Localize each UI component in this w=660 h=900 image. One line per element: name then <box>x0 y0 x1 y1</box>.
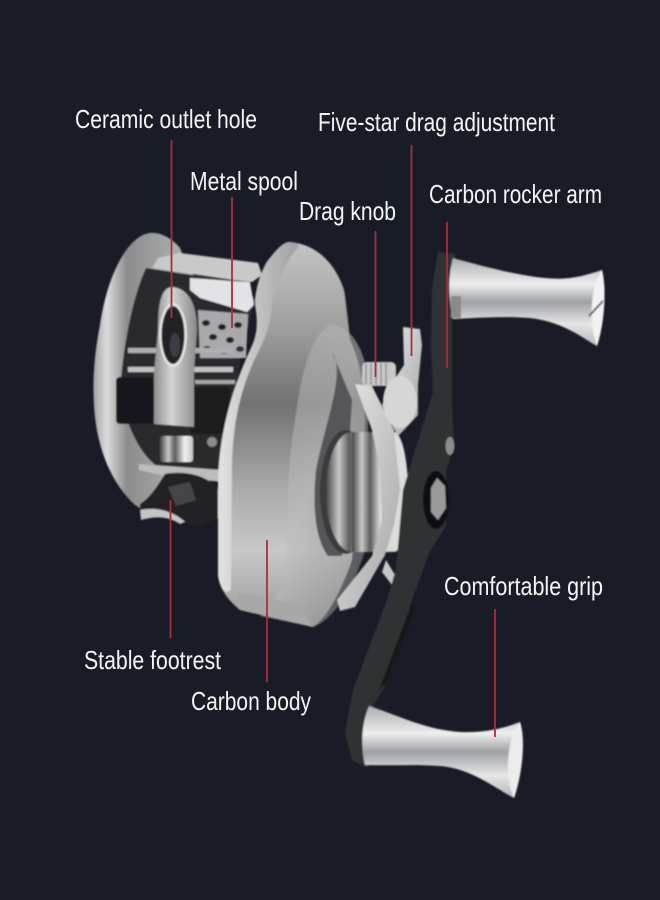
star drag lever <box>337 384 400 611</box>
label: carbon body: Carbon body <box>191 686 311 716</box>
rear plate <box>190 278 254 312</box>
bottom chin <box>238 592 313 627</box>
dark rear of reel <box>338 285 350 345</box>
small gear parts <box>198 435 226 463</box>
label: ceramic outlet hole: Ceramic outlet hole <box>75 104 257 134</box>
leader: ceramic outlet hole <box>170 140 172 318</box>
reel illustration <box>93 233 604 798</box>
leader: carbon body <box>266 540 268 682</box>
label: five-star drag adjustment: Five-star drag adjustment <box>318 107 556 137</box>
top bar <box>152 253 262 282</box>
arm screw <box>446 437 454 455</box>
label: metal spool: Metal spool <box>190 166 298 196</box>
frame inner window <box>120 268 255 475</box>
spool <box>198 310 248 358</box>
carbon rocker arm <box>345 252 455 768</box>
body highlight rim <box>218 242 298 592</box>
bottom handle grip <box>362 706 523 798</box>
label: stable footrest: Stable footrest <box>84 645 222 675</box>
foot bar <box>139 464 222 482</box>
leader: metal spool <box>231 197 233 328</box>
leader lines <box>170 140 495 737</box>
five-star drag tab <box>382 327 422 436</box>
post <box>160 436 193 462</box>
side cover <box>260 325 368 627</box>
label: carbon rocker arm: Carbon rocker arm <box>429 179 602 209</box>
footrest <box>140 473 218 527</box>
left frame <box>93 233 205 512</box>
label: drag knob: Drag knob <box>299 196 396 226</box>
main body <box>218 242 365 627</box>
drag knob <box>362 362 396 386</box>
leader: drag knob <box>374 231 376 377</box>
arm slot <box>379 606 415 690</box>
leader: five-star drag <box>410 145 412 356</box>
leader: stable footrest <box>170 500 172 638</box>
leader: carbon rocker arm <box>446 222 448 368</box>
lower small tab <box>382 560 395 585</box>
hex nut <box>423 471 449 529</box>
top handle grip <box>449 258 604 346</box>
black cylinders <box>116 377 156 424</box>
label: comfortable grip: Comfortable grip <box>444 571 603 601</box>
rods <box>128 348 233 353</box>
knurled ring <box>314 352 352 556</box>
line guide <box>154 287 197 427</box>
bearing <box>320 430 408 554</box>
leader: comfortable grip <box>494 609 496 737</box>
